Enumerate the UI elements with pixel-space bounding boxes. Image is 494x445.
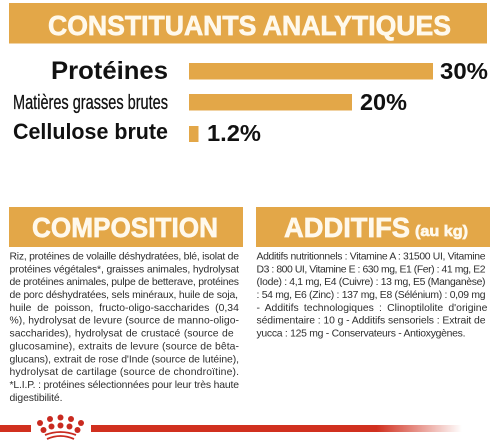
row: protéines: 30% [440, 58, 488, 84]
bar chart: analytical constituents [13, 57, 488, 146]
text block: composition: huile de poisson, fructo-oligo-saccharides (0,34 [10, 303, 239, 314]
text block: composition: de protéines animales, pulpe de betterave, protéines [10, 277, 239, 288]
panel: additifs header [256, 207, 490, 247]
text block: composition: %), hydrolysat de levure (source de manno-oligo- [10, 316, 239, 327]
text block: composition: glucans), extrait de rose d'Inde (source de lutéine), [10, 354, 239, 365]
panel: additifs header: ADDITIFS [284, 212, 410, 243]
panel: constituants analytiques header: CONSTITUANTS ANALYTIQUES [48, 10, 451, 41]
text block: composition: saccharides), hydrolysat de crustacé (source de [10, 329, 234, 340]
row: protéines: Protéines [51, 57, 168, 85]
text block: composition: Riz, protéines de volaille déshydratées, blé, isolat de [10, 252, 239, 262]
text block: composition [10, 252, 239, 404]
row: matières grasses brutes [13, 89, 407, 115]
panel: composition header: COMPOSITION [32, 212, 218, 243]
text block: additifs: D3 : 800 UI, Vitamine E : 630 mg, E1 (Fer) : 41 mg, E2 [256, 264, 486, 275]
row: protéines [51, 57, 488, 85]
text block: additifs: Additifs nutritionnels : Vitamine A : 31500 UI, Vitamine [256, 252, 486, 262]
row: cellulose brute: 1.2% [207, 120, 261, 146]
footer: red line right segment fading out [91, 425, 462, 432]
text block: composition: glucosamine), extraits de levure (source de bêta- [10, 341, 239, 352]
row: cellulose brute: Cellulose brute [13, 119, 168, 144]
text block: additifs: yucca : 125 mg - Conservateurs - Antioxygènes. [256, 329, 466, 340]
icon: royal canin crown [37, 414, 84, 439]
panel: additifs header: (au kg) [415, 223, 468, 240]
text block: additifs [256, 252, 488, 340]
row: matières grasses brutes: Matières grasses brutes [13, 92, 168, 114]
text block: composition: de porc déshydratées, sels minéraux, huile de soja, [10, 290, 238, 301]
text block: composition: *L.I.P. : protéines sélectionnées pour leur très haute [10, 380, 239, 391]
panel: composition header [9, 207, 243, 247]
text block: additifs: sédimentaire : 10 g - Additifs sensoriels : Extrait de [256, 316, 486, 327]
panel: constituants analytiques header [9, 3, 487, 44]
row: cellulose brute [13, 119, 261, 146]
text block: additifs: : 54 mg, E6 (Zinc) : 137 mg, E8 (Sélénium) : 0,09 mg [256, 290, 486, 301]
text block: composition: protéines végétales*, graisses animales, hydrolysat [10, 264, 239, 275]
text block: composition: digestibilité. [10, 393, 62, 404]
row: matières grasses brutes: 20% [360, 89, 407, 115]
text block: composition: hydrolysat de cartilage (source de chondroïtine). [10, 367, 239, 378]
text block: additifs: (Iode) : 4,1 mg, E4 (Cuivre) : 13 mg, E5 (Manganèse) [256, 277, 486, 288]
footer: red line left segment [0, 425, 31, 432]
text block: additifs: - Additifs technologiques : Clinoptilolite d'origine [256, 303, 488, 314]
